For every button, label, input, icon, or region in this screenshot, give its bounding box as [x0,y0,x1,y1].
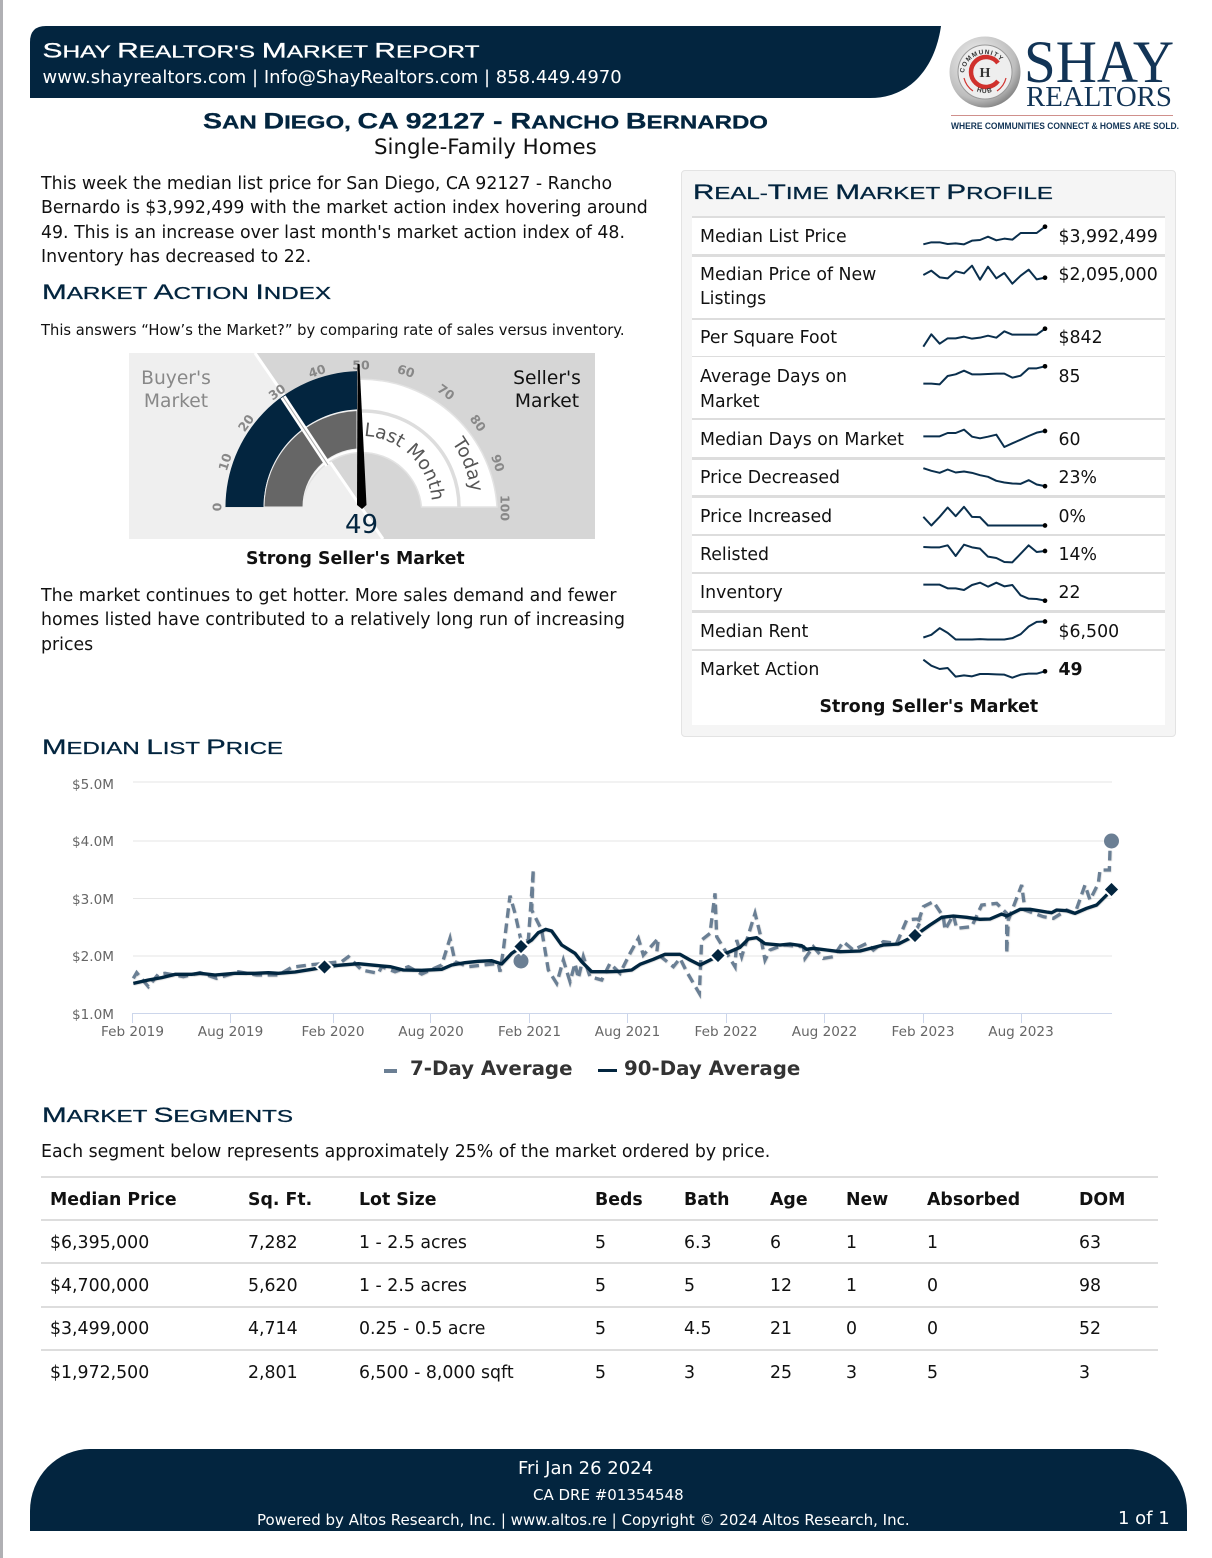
seller label: Seller's [513,368,581,389]
table header: Sq. Ft. [248,1190,312,1210]
row: median days on market: 60 [1058,430,1081,450]
table row 2: 1 - 2.5 acres [359,1276,467,1296]
row: inventory [692,574,1165,610]
table row 2: 12 [770,1276,792,1296]
table row 3: 0 [927,1319,938,1339]
market paragraph: The market continues to get hotter. More sales demand and fewer [41,586,616,606]
tick separator [283,397,328,465]
chart markers [316,834,1120,975]
table row 4: 5 [595,1363,606,1383]
row: median list price: Median List Price [700,227,847,247]
table row 2: 5,620 [248,1276,298,1296]
table row 3 [50,1319,1101,1339]
heading: median list price: M EDIAN L IST P RICE [42,735,283,759]
row: median list price [692,218,1165,254]
table row 3: 21 [770,1319,792,1339]
segments description: Each segment below represents approximately 25% of the market ordered by price. [41,1142,770,1162]
row: average days on market: 85 [1058,367,1081,387]
gauge chart [129,353,595,539]
table header: New [846,1190,888,1210]
report title: SAN D IEGO, CA 92127 - R ANCHO B ERNARDO [203,108,768,134]
table row 4 [50,1363,1090,1383]
table row 2: $4,700,000 [50,1276,149,1296]
intro paragraph: Inventory has decreased to 22. [41,247,311,267]
header banner: www.shayrealtors.com | Info@ShayRealtors.com | 858.449.4970 [42,66,622,88]
table row 2: 0 [927,1276,938,1296]
table row 4: 3 [1079,1363,1090,1383]
gauge chart: Today [454,435,481,490]
row: price decreased [692,460,1165,494]
tick labels: 30 [266,381,289,403]
table row 4: 3 [684,1363,695,1383]
gauge caption: Strong Seller's Market [246,549,465,569]
line chart: median list price [72,777,1119,1040]
row: median list price: $3,992,499 [1058,227,1158,247]
x axis labels: Feb 2021 [498,1024,561,1040]
table header: Lot Size [359,1190,437,1210]
heading: market action index: M ARKET A CTION INDEX [42,280,331,304]
row: price increased: 0% [1058,507,1086,527]
logo: SHAY [1024,29,1174,95]
row: inventory: 22 [1058,583,1081,603]
logo [950,29,1179,131]
row: median rent [692,612,1165,648]
table row 4: $1,972,500 [50,1363,149,1383]
row: market action [692,651,1165,725]
7-day average series [133,841,1112,993]
market paragraph [40,586,625,654]
table row 2: 5 [595,1276,606,1296]
row: median rent: Median Rent [700,622,808,642]
table header: Median Price [50,1190,177,1210]
x axis labels: Aug 2021 [595,1024,660,1040]
seller label [513,368,581,412]
table header: Beds [595,1190,643,1210]
dark arc today [226,371,357,507]
y axis labels: $1.0M [72,1007,114,1023]
logo: REALTORS [1026,82,1172,113]
table row 3: 4.5 [684,1319,712,1339]
intro paragraph: Bernardo is $3,992,499 with the market action index hovering around [41,198,648,218]
row: market action: 49 [1058,660,1083,680]
table header: DOM [1079,1190,1125,1210]
chart legend: 90-Day Average [624,1057,800,1080]
table: market segments [41,1176,1158,1383]
intro paragraph: 49. This is an increase over last month's market action index of 48. [41,222,625,242]
buyer label [141,368,211,412]
x axis labels: Aug 2020 [398,1024,464,1040]
tick labels [210,358,512,521]
buyer label: Market [144,391,208,412]
table row 3: 0.25 - 0.5 acre [359,1319,485,1339]
intro paragraph [40,174,648,267]
buyer label: Buyer's [141,368,211,389]
table row 3: $3,499,000 [50,1319,149,1339]
90-day average series [133,890,1112,983]
tick labels: 70 [435,381,458,403]
footer banner [30,1449,1187,1531]
logo: H [980,66,991,81]
row: relisted: Relisted [700,545,769,565]
x axis labels: Feb 2023 [892,1024,954,1040]
x axis labels: Aug 2023 [988,1024,1054,1040]
row: inventory: Inventory [700,583,783,603]
row: median price of new listings: $2,095,000 [1058,264,1158,284]
seller label: Market [515,391,579,412]
y axis labels [72,777,114,1023]
table row 2: 1 [846,1276,857,1296]
table row 1: 1 [846,1233,857,1253]
row: per square foot [692,320,1165,356]
tick labels: 50 [352,358,370,372]
x axis labels: Feb 2022 [695,1024,757,1040]
table row 3: 5 [595,1319,606,1339]
row: median days on market [692,420,1165,457]
market action description: This answers “How’s the Market?” by comparing rate of sales versus inventory. [41,322,625,339]
x axis labels [101,1024,1054,1040]
table row 4: 3 [846,1363,857,1383]
table row 1: 6 [770,1233,781,1253]
table header: Absorbed [927,1190,1020,1210]
table header: Age [770,1190,808,1210]
white ring [226,379,497,507]
footer license: CA DRE #01354548 [533,1486,684,1504]
row: market action: Strong Seller's Market [820,697,1038,717]
row: per square foot: $842 [1058,328,1103,348]
table row 1: 5 [595,1233,606,1253]
table row 4: 2,801 [248,1363,298,1383]
x axis labels: Aug 2022 [792,1024,857,1040]
x axis labels: Aug 2019 [198,1024,263,1040]
tick labels: 10 [215,451,235,473]
row: price decreased: Price Decreased [700,468,840,488]
x axis labels: Feb 2020 [302,1024,364,1040]
needle [357,364,366,509]
heading: market segments: M ARKET S EGMENTS [42,1103,293,1127]
tick labels: 60 [395,361,417,381]
table row 4: 25 [770,1363,792,1383]
chart legend: 7-Day Average [410,1057,573,1080]
table row 3: 4,714 [248,1319,298,1339]
table row 3: 52 [1079,1319,1101,1339]
table row 1: 1 [927,1233,938,1253]
market paragraph: homes listed have contributed to a relatively long run of increasing [41,610,625,630]
row: median price of new listings: Listings [700,289,766,309]
tick labels: 80 [467,412,489,435]
table row 2 [50,1276,1101,1296]
table row 1: 6.3 [684,1233,712,1253]
y axis labels: $4.0M [72,834,114,850]
table row 1: $6,395,000 [50,1233,149,1253]
tick labels: 100 [498,495,512,521]
row: price increased: Price Increased [700,507,832,527]
row: median days on market: Median Days on Market [700,430,904,450]
table row 2: 98 [1079,1276,1101,1296]
row: price decreased: 23% [1058,468,1097,488]
page number: 1 of 1 [1118,1508,1170,1529]
logo: COMMUNITY [960,50,1004,72]
table row 1: 63 [1079,1233,1101,1253]
y axis labels: $5.0M [72,777,114,793]
row: average days on market [692,357,1165,418]
row: relisted [692,536,1165,572]
x axis labels: Feb 2019 [101,1024,164,1040]
table row 3: 0 [846,1319,857,1339]
y axis labels: $3.0M [72,892,114,908]
arc labels: Last Month [366,422,444,500]
row: average days on market: Average Days on [700,367,847,387]
row: market action: Market Action [700,660,819,680]
table row 4: 5 [927,1363,938,1383]
chart legend [384,1057,800,1080]
table header [50,1190,1125,1210]
table row 2: 5 [684,1276,695,1296]
table header: Bath [684,1190,730,1210]
y axis labels: $2.0M [72,949,114,965]
table row 1: 7,282 [248,1233,298,1253]
row: per square foot: Per Square Foot [700,328,837,348]
header banner: S HAY R EALTOR'S M ARKET R EPORT [42,38,480,62]
panel heading: R EAL- T IME M ARKET P ROFILE [693,180,1053,204]
logo: HUB [977,87,992,94]
tick labels: 90 [488,452,508,474]
grey arc last month [264,410,357,507]
row: price increased [692,498,1165,534]
row: median price of new listings [692,256,1165,318]
panel: real-time market profile [681,170,1176,737]
table row 4: 6,500 - 8,000 sqft [359,1363,514,1383]
intro paragraph: This week the median list price for San Diego, CA 92127 - Rancho [41,174,612,194]
header banner [30,26,941,98]
tick labels: 0 [210,502,224,511]
market paragraph: prices [41,634,93,654]
row: median rent: $6,500 [1058,622,1119,642]
table row 1: 1 - 2.5 acres [359,1233,467,1253]
footer copyright: Powered by Altos Research, Inc. | www.altos.re | Copyright © 2024 Altos Research, Inc. [257,1511,910,1529]
table row 1 [50,1233,1101,1253]
left page edge [0,0,3,1558]
row: relisted: 14% [1058,545,1097,565]
tick labels: 20 [235,411,257,434]
row: median price of new listings: Median Price of New [700,264,876,284]
tick labels: 40 [306,361,328,381]
subtitle: Single-Family Homes [374,134,597,160]
footer date: Fri Jan 26 2024 [518,1458,653,1479]
row: average days on market: Market [700,392,760,412]
